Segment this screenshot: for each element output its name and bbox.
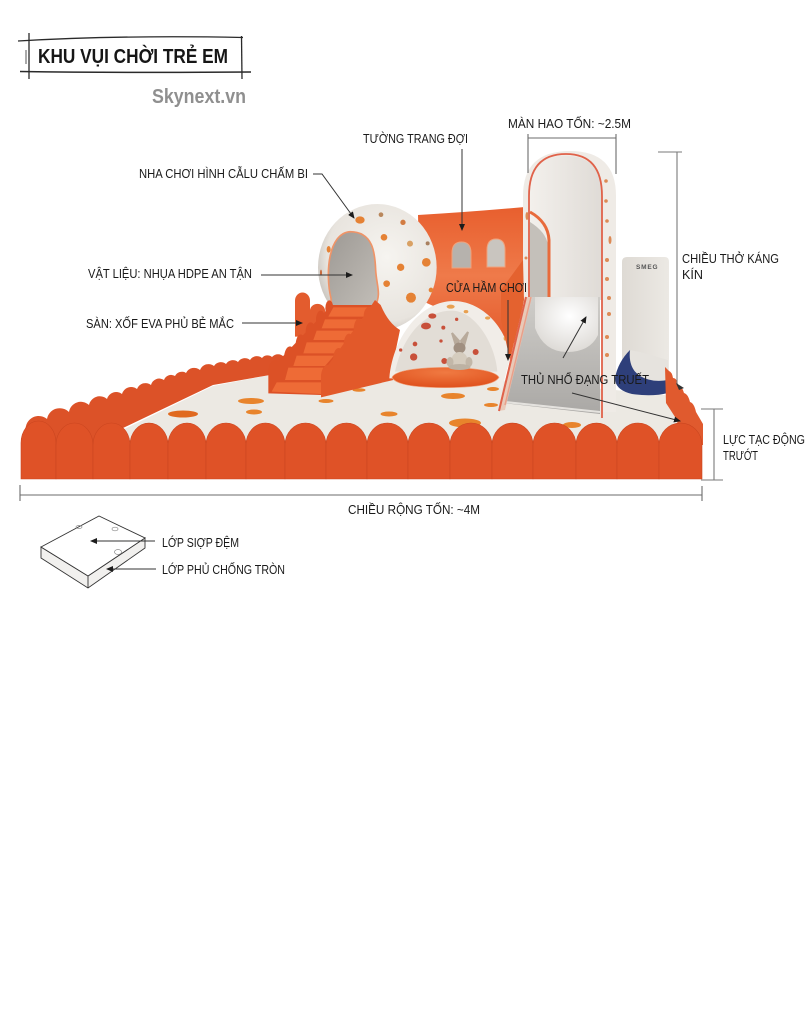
dimension: top width <box>528 134 616 174</box>
label: impact force <box>723 432 805 463</box>
callout: tunnel door <box>446 280 527 360</box>
foam mat diagram <box>41 516 285 588</box>
front fence <box>21 421 702 479</box>
callout: waiting wall <box>363 131 468 230</box>
SMEG panel <box>622 257 669 385</box>
right side fence <box>665 367 703 445</box>
label: impact force: TRƯỚT <box>723 448 758 463</box>
label: height: CHIỀU THỞ KÁNG <box>682 251 779 266</box>
floor dots <box>168 387 581 428</box>
staircase <box>268 292 400 397</box>
callout: slide: THỦ NHỔ ĐẠNG TRUẾT <box>521 372 649 387</box>
callout: waiting wall: TƯỜNG TRANG ĐỢI <box>363 131 468 146</box>
dimension: height <box>658 152 684 390</box>
dimension: fence height <box>701 409 723 480</box>
label: height: KÍN <box>682 267 703 282</box>
callout: tunnel door: CỬA HẦM CHƠI <box>446 280 527 295</box>
play area illustration <box>21 151 703 479</box>
blue bean bag <box>615 350 668 395</box>
title: KHU VỤI CHỜI TRẺ EM <box>38 44 228 68</box>
callout: material: VẬT LIỆU: NHỤA HDPE AN TẬN <box>88 266 252 281</box>
callout: slide <box>521 317 680 421</box>
callout: coating layer: LỚP PHỦ CHỐNG TRÒN <box>162 562 285 577</box>
callout: foam layer: LỚP SIỢP ĐỆM <box>162 535 239 550</box>
label: height <box>682 251 779 282</box>
SMEG panel: SMEG <box>636 264 658 271</box>
small dome tunnel <box>389 301 510 390</box>
slide left edge <box>498 297 532 411</box>
title <box>18 33 251 79</box>
slide surface <box>503 297 600 414</box>
polka dot sphere playhouse <box>318 204 437 331</box>
floor <box>110 372 700 445</box>
callout: sphere house <box>139 166 354 218</box>
back left fence <box>22 354 300 445</box>
brand name: Skynext.vn <box>152 86 246 108</box>
callout: floor: SÀN: XỐF EVA PHỦ BẺ MẮC <box>86 316 234 331</box>
callout: sphere house: NHA CHƠI HÌNH CẪLU CHẤM BI <box>139 166 308 181</box>
orange back wall <box>418 207 549 345</box>
tall arch slide tower <box>498 151 616 418</box>
dimension: overall width <box>20 485 702 501</box>
label: top width: MÀN HAO TỐN: ~2.5M <box>508 116 631 131</box>
label: overall width: CHIỀU RỘNG TỐN: ~4M <box>348 502 480 517</box>
toy bunny <box>446 332 472 370</box>
